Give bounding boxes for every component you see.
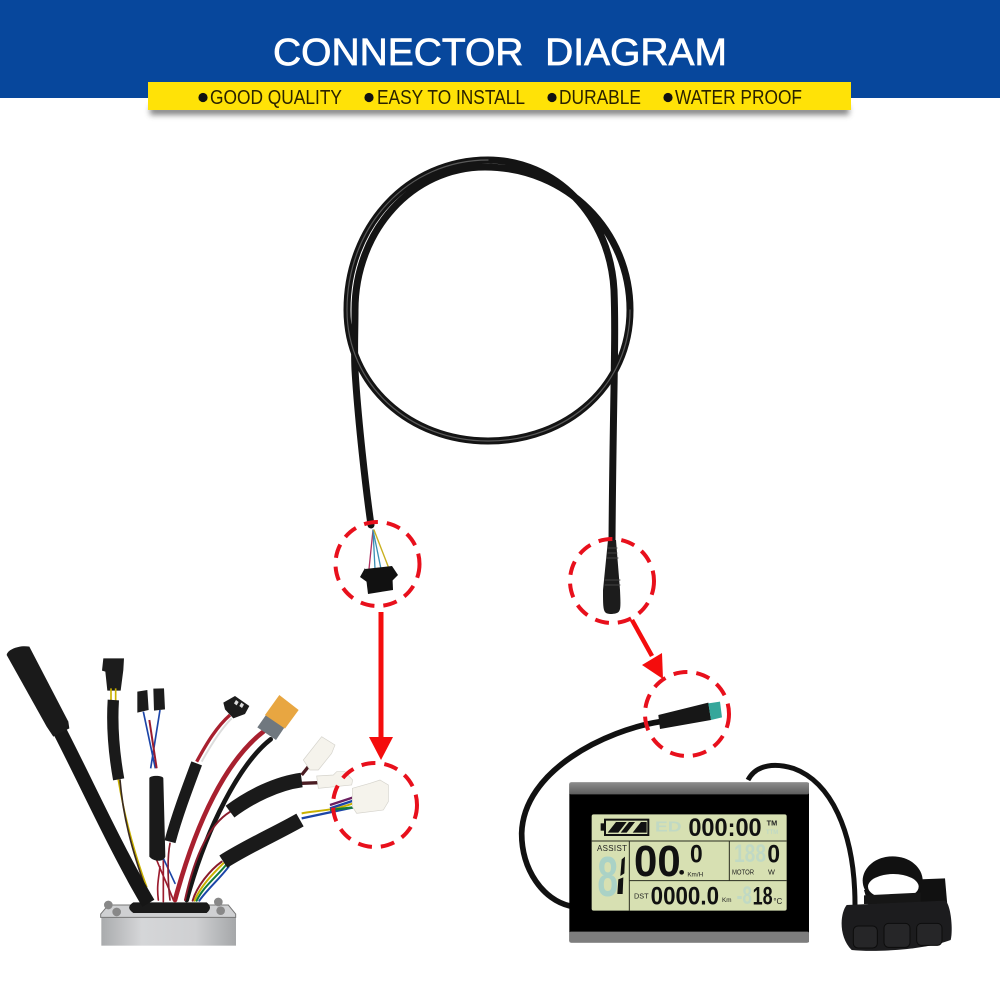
ghost segments: -8 bbox=[737, 883, 752, 910]
ghost segments: TTM bbox=[766, 830, 778, 836]
feature: good quality: GOOD QUALITY bbox=[210, 87, 342, 109]
assist level: ASSIST bbox=[597, 844, 627, 853]
wires into controller bbox=[118, 732, 271, 902]
callout circle: extension cable plug end bbox=[570, 539, 654, 623]
speed readout: Km/H bbox=[687, 872, 704, 879]
controller body bbox=[101, 898, 236, 946]
motor controller with cables bbox=[7, 646, 388, 946]
battery icon bbox=[601, 820, 648, 835]
main thick cable and plug bbox=[7, 646, 148, 903]
XT60 battery connector bbox=[257, 695, 299, 740]
distance readout: Km bbox=[722, 897, 731, 904]
callout circle: controller connector bbox=[333, 763, 417, 847]
temperature readout: °C bbox=[773, 897, 783, 906]
feature: easy to install: EASY TO INSTALL bbox=[377, 87, 525, 109]
display housing bbox=[569, 782, 809, 943]
remote cable bbox=[748, 765, 855, 905]
feature: durable: DURABLE bbox=[559, 87, 641, 109]
distance readout: 0000.0 bbox=[651, 882, 719, 910]
motor power readout: MOTOR bbox=[732, 867, 754, 876]
callout circle: extension cable 5-pin end bbox=[336, 522, 420, 606]
distance readout: DST bbox=[634, 892, 649, 901]
time readout: TM bbox=[767, 818, 777, 827]
handlebar button pad bbox=[842, 856, 952, 951]
motor power readout bbox=[732, 841, 780, 876]
coiled extension cable bbox=[347, 160, 630, 614]
header banner bbox=[0, 0, 1000, 98]
6-pin white connector lead with sleeve bbox=[223, 780, 388, 862]
speed readout bbox=[634, 838, 704, 886]
motor power readout: 0 bbox=[767, 841, 780, 868]
arrow: cable plug to display connector bbox=[630, 619, 663, 679]
connector lead with sleeve bbox=[102, 658, 124, 779]
wire end: 5-pin connector bbox=[360, 530, 398, 594]
feature strip bbox=[148, 82, 851, 115]
SM connector lead with sleeve bbox=[170, 696, 249, 842]
LCD display unit bbox=[522, 702, 952, 951]
feature: water proof: WATER PROOF bbox=[675, 87, 802, 109]
ghost segments: 188 bbox=[734, 841, 766, 868]
assist level: 8 bbox=[597, 846, 618, 909]
ghost segments: ED bbox=[655, 820, 682, 836]
twin connector lead with sleeve bbox=[137, 688, 165, 861]
title: CONNECTOR DIAGRAM bbox=[273, 32, 727, 74]
wire end: round waterproof plug bbox=[603, 540, 620, 614]
ghost segments bbox=[655, 820, 778, 910]
time readout: 000:00 bbox=[688, 815, 762, 842]
speed readout: 00 bbox=[634, 838, 681, 886]
callout circle: display connector bbox=[645, 672, 729, 756]
motor power readout: W bbox=[768, 867, 775, 876]
display cable bbox=[522, 722, 660, 906]
arrow: cable end to controller bbox=[369, 612, 393, 760]
temperature readout: 18 bbox=[753, 882, 773, 910]
waterproof connector bbox=[658, 702, 722, 729]
LCD screen bbox=[592, 814, 787, 911]
white connector leads with sleeve bbox=[230, 737, 353, 812]
speed readout: 0 bbox=[690, 842, 703, 869]
